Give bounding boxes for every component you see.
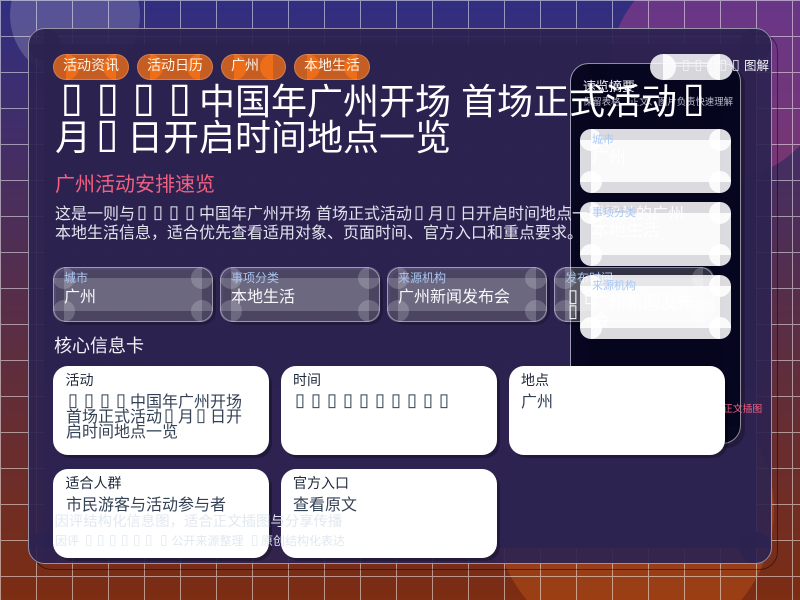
stat card: 事项分类: 事项分类	[231, 271, 279, 285]
summary paragraph: ▯	[414, 202, 424, 223]
info card: 活动: 中国年广州开场	[130, 393, 242, 411]
info card: 官方入口	[281, 469, 500, 561]
panel: preview summary background	[570, 63, 745, 448]
info card: 活动: 日开	[210, 409, 242, 426]
tags	[53, 54, 370, 80]
tag: 本地生活	[294, 54, 370, 80]
stat card: 城市: 城市	[64, 270, 88, 285]
footer line 2: ▯▯▯▯▯▯▯	[85, 532, 168, 548]
info card: 活动: 月	[178, 409, 194, 426]
panel mini card: 事项分类: 本地生活	[592, 221, 660, 240]
stat card: 城市: 广州	[64, 288, 96, 306]
tag: 活动资讯: 活动资讯	[63, 57, 119, 73]
summary paragraph: 月	[428, 206, 444, 223]
info card: 活动: 活动	[66, 372, 94, 388]
title: 中国年广州开场	[199, 81, 451, 122]
tag: diagram label: ▯▯▯▯▯	[682, 57, 740, 73]
info card: 活动: ▯	[164, 405, 174, 426]
panel mini card: 事项分类: 事项分类	[592, 205, 636, 219]
tag: 活动资讯	[53, 54, 129, 80]
stat card: 来源机构	[387, 267, 550, 325]
tag: 活动日历	[137, 54, 213, 80]
summary paragraph: 首场正式活动	[316, 205, 412, 223]
footer line 2: 公开来源整理	[172, 533, 244, 548]
footer line 1: 因评结构化信息图，适合正文插图与分享传播	[54, 513, 343, 530]
heading: core info: 核心信息卡	[54, 336, 144, 356]
title: ▯	[96, 109, 119, 157]
summary paragraph: ▯	[446, 202, 456, 223]
tag: 广州: 广州	[231, 57, 259, 73]
stat card: 来源机构: 来源机构	[398, 270, 446, 285]
tag: 广州	[221, 54, 286, 80]
info card: 活动: 启时间地点一览	[66, 423, 178, 441]
stat card: 来源机构: 广州新闻发布会	[398, 288, 510, 306]
info card: 时间	[281, 366, 500, 458]
stat card: 发布时间: ▯	[568, 301, 578, 322]
title: 月	[55, 117, 91, 158]
info card: 活动	[53, 366, 272, 458]
panel heading: 速览摘要	[583, 79, 635, 94]
summary paragraph: ▯▯▯▯	[137, 202, 195, 223]
side caption: 正文插图	[723, 402, 762, 415]
footer line 2: 因评	[55, 534, 79, 548]
summary paragraph: 日开启时间地点一则相关的广州	[460, 205, 684, 223]
panel subheading: 保留表格、正文、图片负责快速理解	[583, 96, 733, 107]
panel mini card: 城市: 广州	[592, 148, 626, 167]
info card: 适合人群: 市民游客与活动参与者	[66, 496, 226, 514]
stat card: 事项分类	[220, 267, 383, 325]
panel mini card: 来源机构: 来源机构	[592, 278, 636, 292]
info card: 地点: 地点	[521, 372, 549, 388]
info card: 活动: 首场正式活动	[66, 408, 162, 426]
info card: 时间: ▯▯▯▯▯▯▯▯▯▯	[295, 390, 449, 411]
tag: 本地生活: 本地生活	[304, 57, 360, 73]
panel mini card: 来源机构: 广州新闻发布	[592, 293, 694, 312]
info card: 地点: 广州	[521, 393, 553, 411]
info card: 官方入口: 查看原文	[293, 496, 357, 514]
title: ▯	[682, 73, 705, 121]
stat card: 城市	[53, 267, 216, 325]
info card: 时间: 时间	[293, 372, 321, 388]
tag: diagram label: 图解	[744, 59, 769, 73]
panel mini card: 来源机构	[580, 275, 731, 339]
title: 日开启时间地点一览	[127, 117, 451, 158]
panel mini card: 城市	[580, 129, 731, 193]
panel mini card: 城市: 城市	[592, 132, 614, 146]
info card: 活动: ▯	[196, 405, 206, 426]
footer line 2: 原创结构化表达	[261, 533, 345, 548]
title: 首场正式活动	[461, 81, 677, 122]
stat card: 发布时间	[554, 267, 717, 325]
summary paragraph: 本地生活信息，适合优先查看适用对象、页面时间、官方入口和重点要求。	[55, 224, 583, 242]
tag: 活动日历: 活动日历	[147, 57, 203, 73]
info card: 活动: ▯▯▯▯	[68, 390, 126, 411]
stat card: 发布时间: 发布时间	[565, 270, 613, 285]
info card: 地点	[509, 366, 728, 458]
summary paragraph: 这是一则与	[55, 205, 135, 223]
panel mini card: 来源机构: 会	[592, 311, 609, 330]
panel mini card: 事项分类	[580, 202, 731, 266]
summary paragraph: 中国年广州开场	[199, 205, 311, 223]
stat card: 事项分类: 本地生活	[231, 288, 295, 306]
footer line 2: ▯	[251, 532, 259, 548]
title: ▯▯▯▯	[60, 73, 191, 121]
info card: 适合人群	[53, 469, 272, 561]
subtitle: 广州活动安排速览	[55, 173, 215, 196]
tag: diagram label	[650, 54, 769, 80]
info card: 官方入口: 官方入口	[293, 475, 349, 491]
stat card: 发布时间: ▯▯	[568, 286, 594, 307]
info card: 适合人群: 适合人群	[66, 475, 122, 491]
